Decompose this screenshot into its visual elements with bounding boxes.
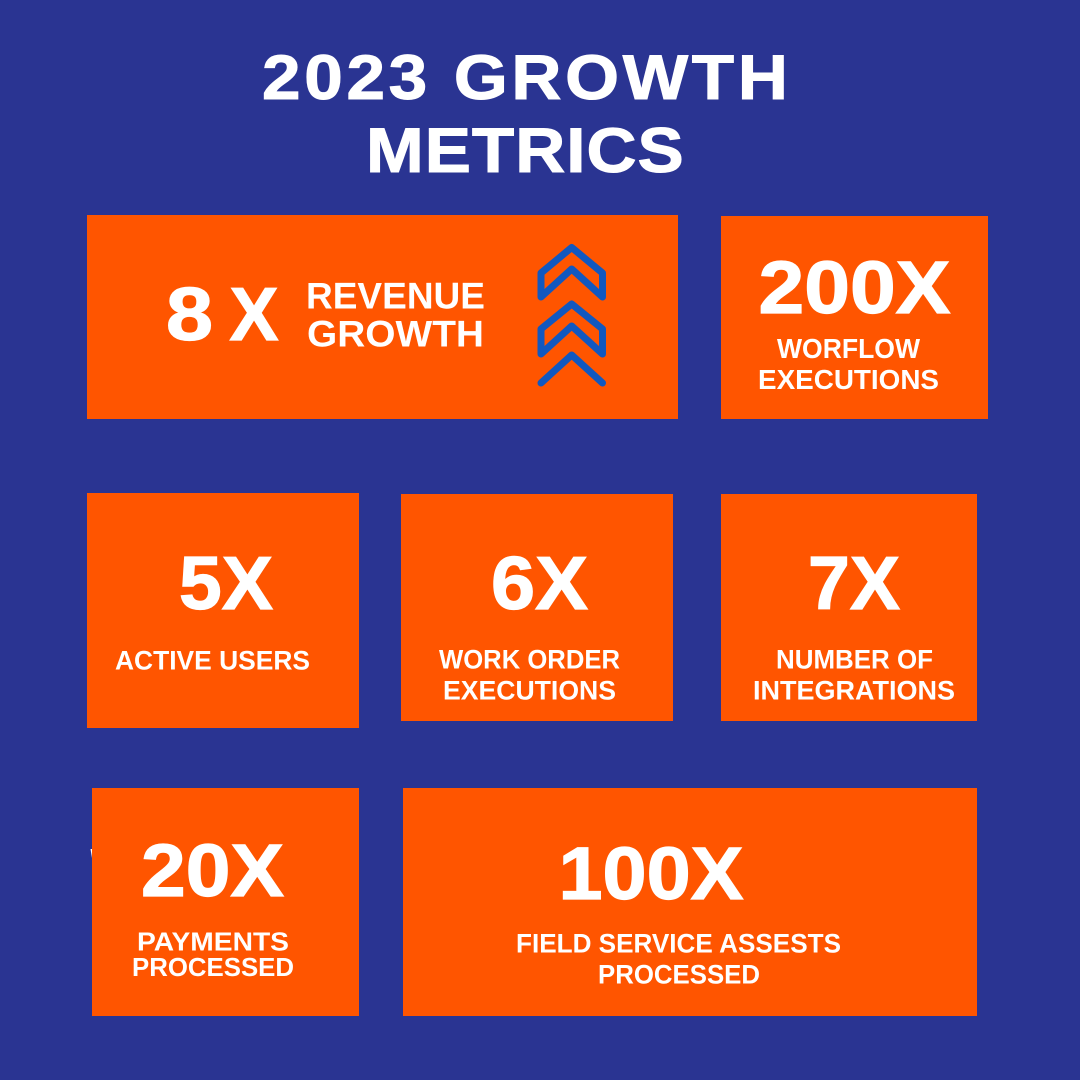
title: 2023 GROWTH (262, 43, 792, 113)
panel: field service assets processed (403, 788, 977, 1016)
panel: number of integrations (721, 494, 977, 721)
metric label: workflow executions: WORFLOW (777, 333, 920, 364)
metric label: revenue growth: GROWTH (307, 314, 484, 354)
title: METRICS (366, 116, 685, 186)
metric value: 6X: 6X (491, 541, 588, 625)
metric label: work order executions (439, 644, 620, 706)
panel: active users (87, 493, 359, 728)
metric value: 8X: X (230, 272, 278, 356)
metric value: 100X: 100X (558, 832, 744, 915)
metric label: field service assets processed: PROCESSED (598, 960, 760, 990)
stray white sliver (90, 849, 92, 858)
metric label: number of integrations (753, 644, 955, 706)
metric label: payments processed (132, 926, 294, 982)
title (262, 43, 792, 186)
metric label: number of integrations: NUMBER OF (776, 644, 933, 674)
metric label: work order executions: EXECUTIONS (443, 676, 616, 706)
panel: workflow executions (721, 216, 988, 419)
metric value: 8X (166, 272, 278, 356)
panel: work order executions (401, 494, 673, 721)
panel: payments processed (92, 788, 359, 1016)
metric label: revenue growth: REVENUE (306, 276, 485, 316)
metric label: workflow executions (758, 333, 939, 395)
metric label: payments processed: PROCESSED (132, 952, 294, 982)
metric value: 200X: 200X (758, 246, 950, 329)
metric label: field service assets processed: FIELD SERVICE ASSESTS (516, 928, 841, 958)
metric label: active users: ACTIVE USERS (115, 646, 310, 676)
icon: upward chevrons (541, 248, 602, 383)
metric label: field service assets processed (516, 928, 841, 990)
panel: revenue growth (87, 215, 678, 419)
metric label: payments processed: PAYMENTS (137, 926, 289, 956)
metric value: 5X: 5X (179, 541, 273, 625)
metric value: 8X: 8 (166, 272, 213, 356)
metric label: revenue growth (306, 276, 485, 354)
metric value: 7X: 7X (808, 541, 900, 625)
metric label: workflow executions: EXECUTIONS (758, 364, 939, 395)
metric label: work order executions: WORK ORDER (439, 644, 620, 674)
metric label: number of integrations: INTEGRATIONS (753, 676, 955, 706)
metric value: 20X: 20X (141, 829, 284, 912)
